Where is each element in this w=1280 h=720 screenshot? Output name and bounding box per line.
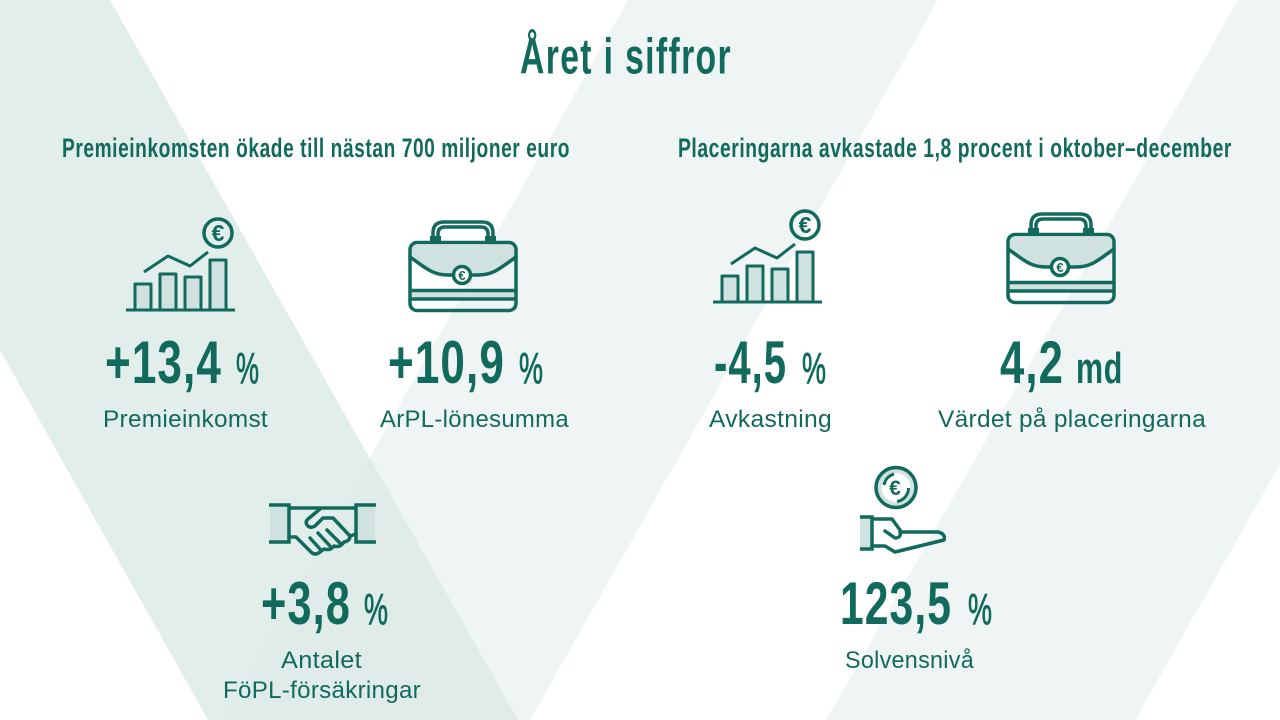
icon: growth chart with euro coin: € [212, 220, 225, 246]
title: Året i siffror [520, 28, 732, 84]
icon: growth chart with euro coin (investments): € [799, 212, 812, 238]
icon: briefcase with euro [409, 222, 517, 310]
value: investment value: 4,2 [1000, 329, 1064, 396]
infographic canvas: % [364, 585, 388, 634]
icon: briefcase with euro (investments): € [1056, 260, 1064, 275]
infographic canvas: % [802, 344, 826, 393]
value: premium income: +13,4 [105, 329, 222, 396]
label: FöPL policies: Antalet [281, 647, 362, 674]
icon: hand with euro coin: € [889, 477, 901, 500]
label: solvency: Solvensnivå [845, 647, 974, 674]
icon: handshake [269, 505, 376, 554]
label: FöPL policies [223, 647, 421, 704]
label: investment value: Värdet på placeringarna [938, 406, 1206, 433]
infographic canvas: % [236, 344, 259, 393]
heading: premium income: Premieinkomsten ökade till nästan 700 miljoner euro [62, 133, 570, 163]
label: premium income: Premieinkomst [103, 406, 268, 433]
infographic canvas: md [1076, 344, 1123, 393]
icon: growth chart with euro coin [126, 219, 235, 310]
value: return: -4,5 [714, 329, 787, 396]
label: return: Avkastning [709, 406, 832, 433]
value: ArPL payroll: +10,9 [388, 329, 505, 396]
value: FöPL policies: +3,8 [261, 570, 351, 637]
value: solvency: 123,5 [840, 570, 952, 637]
icon: briefcase with euro: € [458, 268, 466, 283]
label: FöPL policies: FöPL-försäkringar [223, 677, 421, 704]
icon: growth chart with euro coin (investments) [713, 211, 822, 302]
infographic canvas: % [519, 344, 543, 393]
icon: briefcase with euro (investments) [1007, 214, 1115, 302]
label: ArPL payroll: ArPL-lönesumma [380, 406, 569, 433]
infographic canvas: % [968, 585, 992, 634]
icon: hand with euro coin [860, 468, 944, 552]
